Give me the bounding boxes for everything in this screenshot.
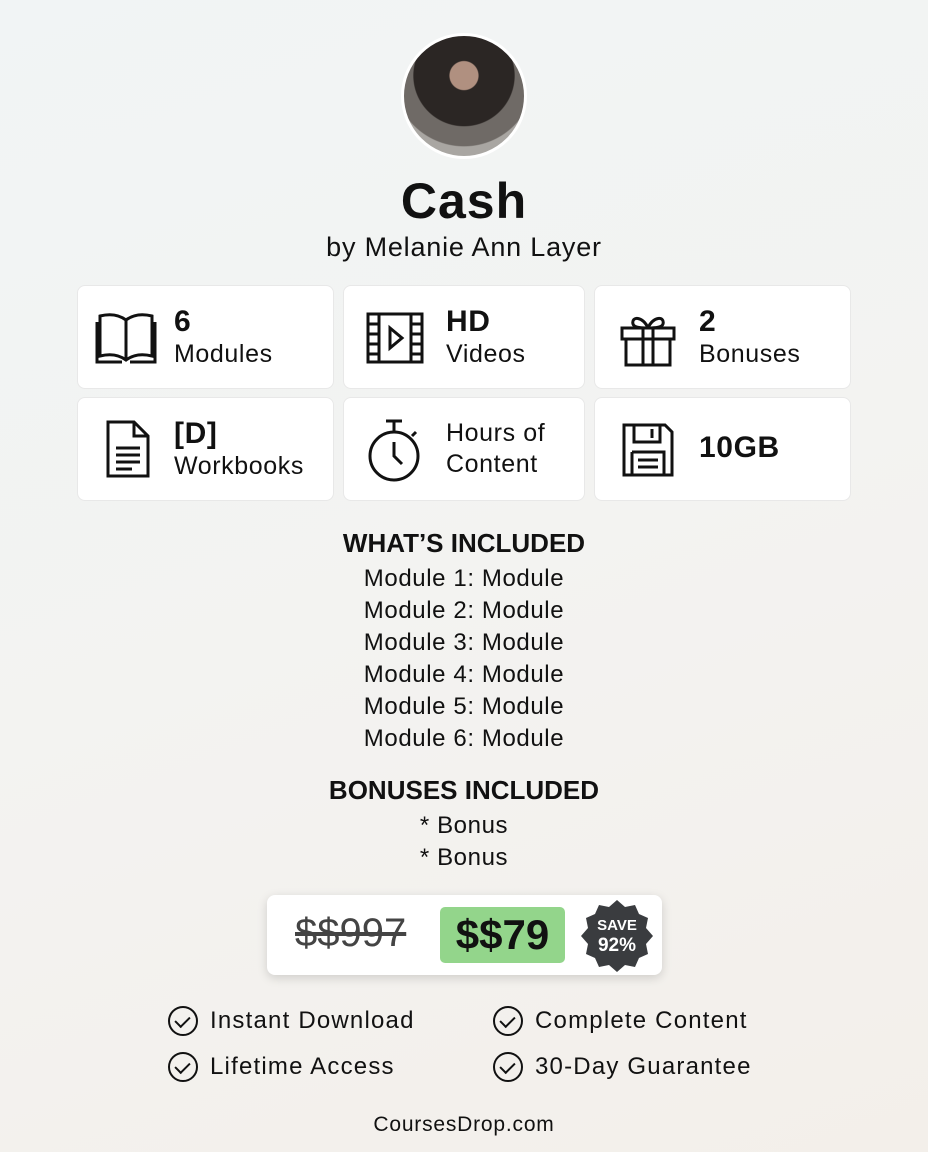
text: [D]: [174, 417, 217, 450]
icon: floppy: [622, 424, 674, 476]
module list: [364, 565, 564, 752]
new price: [440, 907, 565, 963]
feature: complete content: Complete Content: [535, 1007, 748, 1034]
price box: [267, 895, 662, 975]
text: Videos: [446, 340, 526, 368]
module list: Module 2: Module: [364, 597, 564, 624]
module list: Module 6: Module: [364, 725, 564, 752]
icon: book: [96, 313, 156, 364]
text: Workbooks: [174, 452, 304, 480]
card: size: [594, 397, 851, 501]
module list: Module 5: Module: [364, 693, 564, 720]
module list: Module 1: Module: [364, 565, 564, 592]
icon: gift: [620, 316, 676, 366]
footer: CoursesDrop.com: [373, 1113, 555, 1136]
heading: what's included: WHAT’S INCLUDED: [343, 528, 585, 558]
save badge: SAVE: [597, 917, 637, 934]
text: Content: [446, 450, 538, 478]
new price: $$79: [456, 911, 549, 958]
heading: bonuses included: BONUSES INCLUDED: [329, 775, 599, 805]
bonus list: [420, 812, 508, 871]
text: 2: [699, 305, 716, 338]
save badge: [581, 900, 653, 972]
text: Bonuses: [699, 340, 800, 368]
text: Modules: [174, 340, 273, 368]
bonus list: * Bonus: [420, 844, 508, 871]
icon: stopwatch: [368, 420, 420, 482]
title: Cash: [401, 173, 527, 229]
text: [446, 419, 545, 478]
module list: Module 3: Module: [364, 629, 564, 656]
text: [174, 305, 273, 368]
avatar: [401, 33, 527, 159]
text: [446, 305, 526, 368]
text: 6: [174, 305, 191, 338]
subtitle: by Melanie Ann Layer: [326, 232, 602, 262]
card: bonuses: [594, 285, 851, 389]
bonus list: * Bonus: [420, 812, 508, 839]
card: videos: [343, 285, 585, 389]
feature: lifetime access: Lifetime Access: [210, 1053, 395, 1080]
feature: guarantee: 30-Day Guarantee: [535, 1053, 752, 1080]
text: [174, 417, 304, 480]
card: workbooks: [77, 397, 334, 501]
module list: Module 4: Module: [364, 661, 564, 688]
save badge: 92%: [598, 935, 636, 956]
old price: $$997: [295, 911, 406, 955]
text: HD: [446, 305, 491, 338]
text: [699, 305, 800, 368]
card: hours: [343, 397, 585, 501]
icon: film: [366, 312, 424, 364]
text: Hours of: [446, 419, 545, 447]
feature: instant download: Instant Download: [210, 1007, 415, 1034]
text: 10GB: [699, 431, 780, 464]
icon: document: [106, 420, 150, 478]
card: modules: [77, 285, 334, 389]
